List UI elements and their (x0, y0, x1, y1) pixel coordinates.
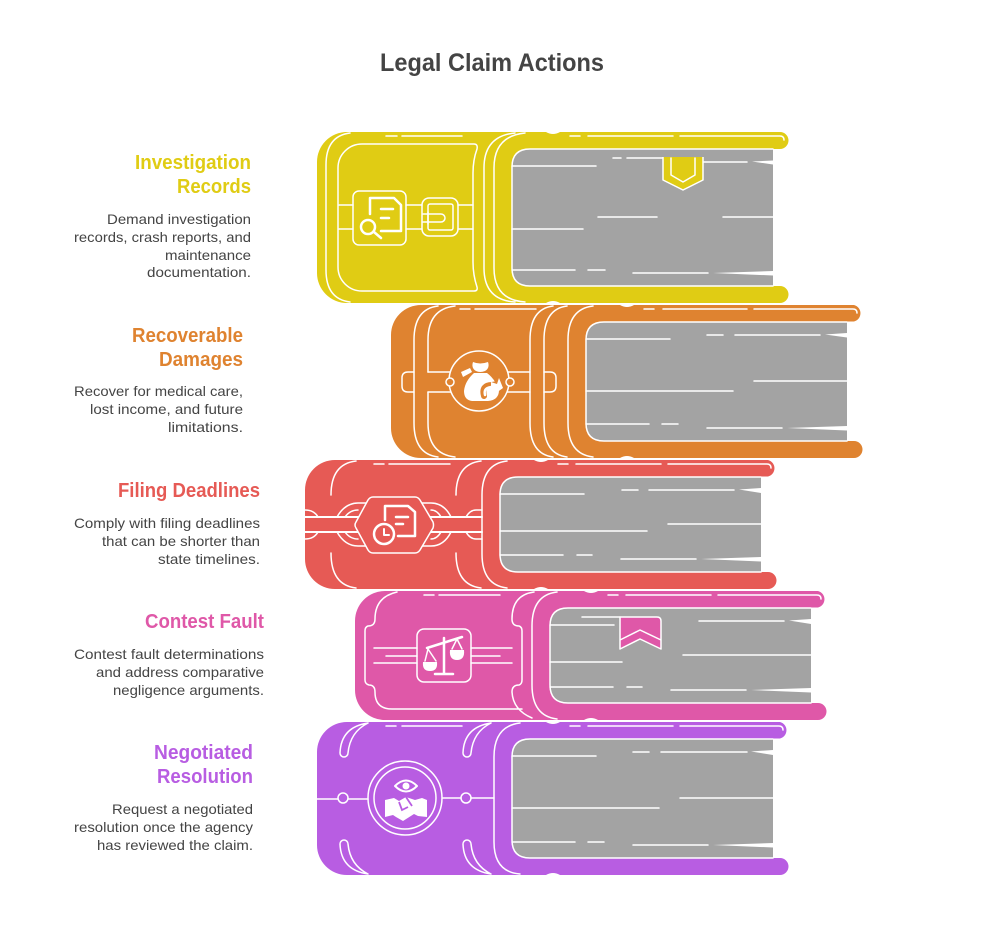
heading: Recoverable Damages: Damages (159, 349, 243, 371)
text block: Filing Deadlines (74, 480, 260, 567)
strap (317, 798, 494, 799)
title: Legal Claim Actions (380, 49, 604, 77)
pages (550, 608, 811, 703)
description: Contest Fault: negligence arguments. (113, 682, 264, 698)
icon: document search (353, 191, 406, 245)
description: Investigation Records (74, 211, 251, 280)
pages (512, 149, 773, 286)
cover lines (386, 136, 784, 140)
icon: buckle (422, 198, 458, 236)
heading: Investigation Records: Investigation (135, 152, 251, 174)
description: Investigation Records: records, crash reports, and (74, 229, 251, 245)
bookmark (620, 617, 661, 649)
icon: eye and handshake (368, 761, 442, 835)
description: Recoverable Damages: Recover for medical care, (74, 383, 243, 399)
heading: Negotiated Resolution: Negotiated (154, 742, 253, 764)
book: Investigation Records (yellow) (317, 132, 788, 303)
text block: Contest Fault (74, 611, 264, 698)
strap (305, 517, 482, 532)
description: Contest Fault (74, 646, 264, 698)
heading: Investigation Records: Records (177, 176, 251, 198)
label panel (365, 592, 534, 718)
heading: Filing Deadlines: Filing Deadlines (118, 480, 260, 502)
description: Recoverable Damages: limitations. (168, 419, 243, 435)
description: Negotiated Resolution: Request a negotiated (112, 801, 253, 817)
cover (305, 460, 776, 589)
cover (317, 132, 788, 303)
description: Negotiated Resolution: has reviewed the claim. (97, 837, 253, 853)
cover (355, 591, 827, 720)
heading: Negotiated Resolution (154, 742, 253, 788)
description: Investigation Records: documentation. (147, 264, 251, 280)
text block: Recoverable Damages (74, 325, 243, 435)
cover lines (424, 595, 821, 599)
pages (500, 477, 761, 572)
cover (317, 722, 788, 875)
description: Contest Fault: Contest fault determinations (74, 646, 264, 662)
cover lines (386, 726, 783, 730)
book: Negotiated Resolution (purple) (317, 722, 788, 875)
strap lines (374, 648, 512, 663)
heading: Investigation Records (135, 152, 251, 198)
heading: Contest Fault: Contest Fault (145, 611, 264, 633)
description: Recoverable Damages (74, 383, 243, 435)
description: Filing Deadlines: Comply with filing deadlines (74, 515, 260, 531)
inner panel (338, 144, 477, 291)
icon: scales (417, 629, 471, 682)
pages (586, 322, 847, 441)
strap (402, 372, 556, 392)
cover (391, 305, 862, 458)
book: Contest Fault (pink) (355, 591, 827, 720)
heading: Recoverable Damages (132, 325, 243, 371)
cover lines (460, 309, 857, 313)
icon: money bag (446, 351, 514, 411)
description: Investigation Records: maintenance (165, 247, 251, 263)
bookmark (663, 157, 703, 190)
description: Investigation Records: Demand investigation (107, 211, 251, 227)
icon: document with clock (355, 497, 434, 553)
description: Negotiated Resolution (74, 801, 253, 853)
description: Negotiated Resolution: resolution once the agency (74, 819, 253, 835)
cover lines (374, 464, 771, 468)
description: Filing Deadlines (74, 515, 260, 567)
heading: Negotiated Resolution: Resolution (157, 766, 253, 788)
heading: Recoverable Damages: Recoverable (132, 325, 243, 347)
strap (339, 205, 473, 229)
book: Filing Deadlines (red) (305, 460, 776, 589)
pages (512, 739, 773, 858)
text block: Negotiated Resolution (74, 742, 253, 853)
book: Recoverable Damages (orange) (391, 305, 862, 458)
text block: Investigation Records (74, 152, 251, 280)
capsule arcs (340, 723, 491, 874)
description: Filing Deadlines: that can be shorter than (102, 533, 260, 549)
description: Contest Fault: and address comparative (96, 664, 264, 680)
description: Recoverable Damages: lost income, and future (90, 401, 243, 417)
description: Filing Deadlines: state timelines. (158, 551, 260, 567)
